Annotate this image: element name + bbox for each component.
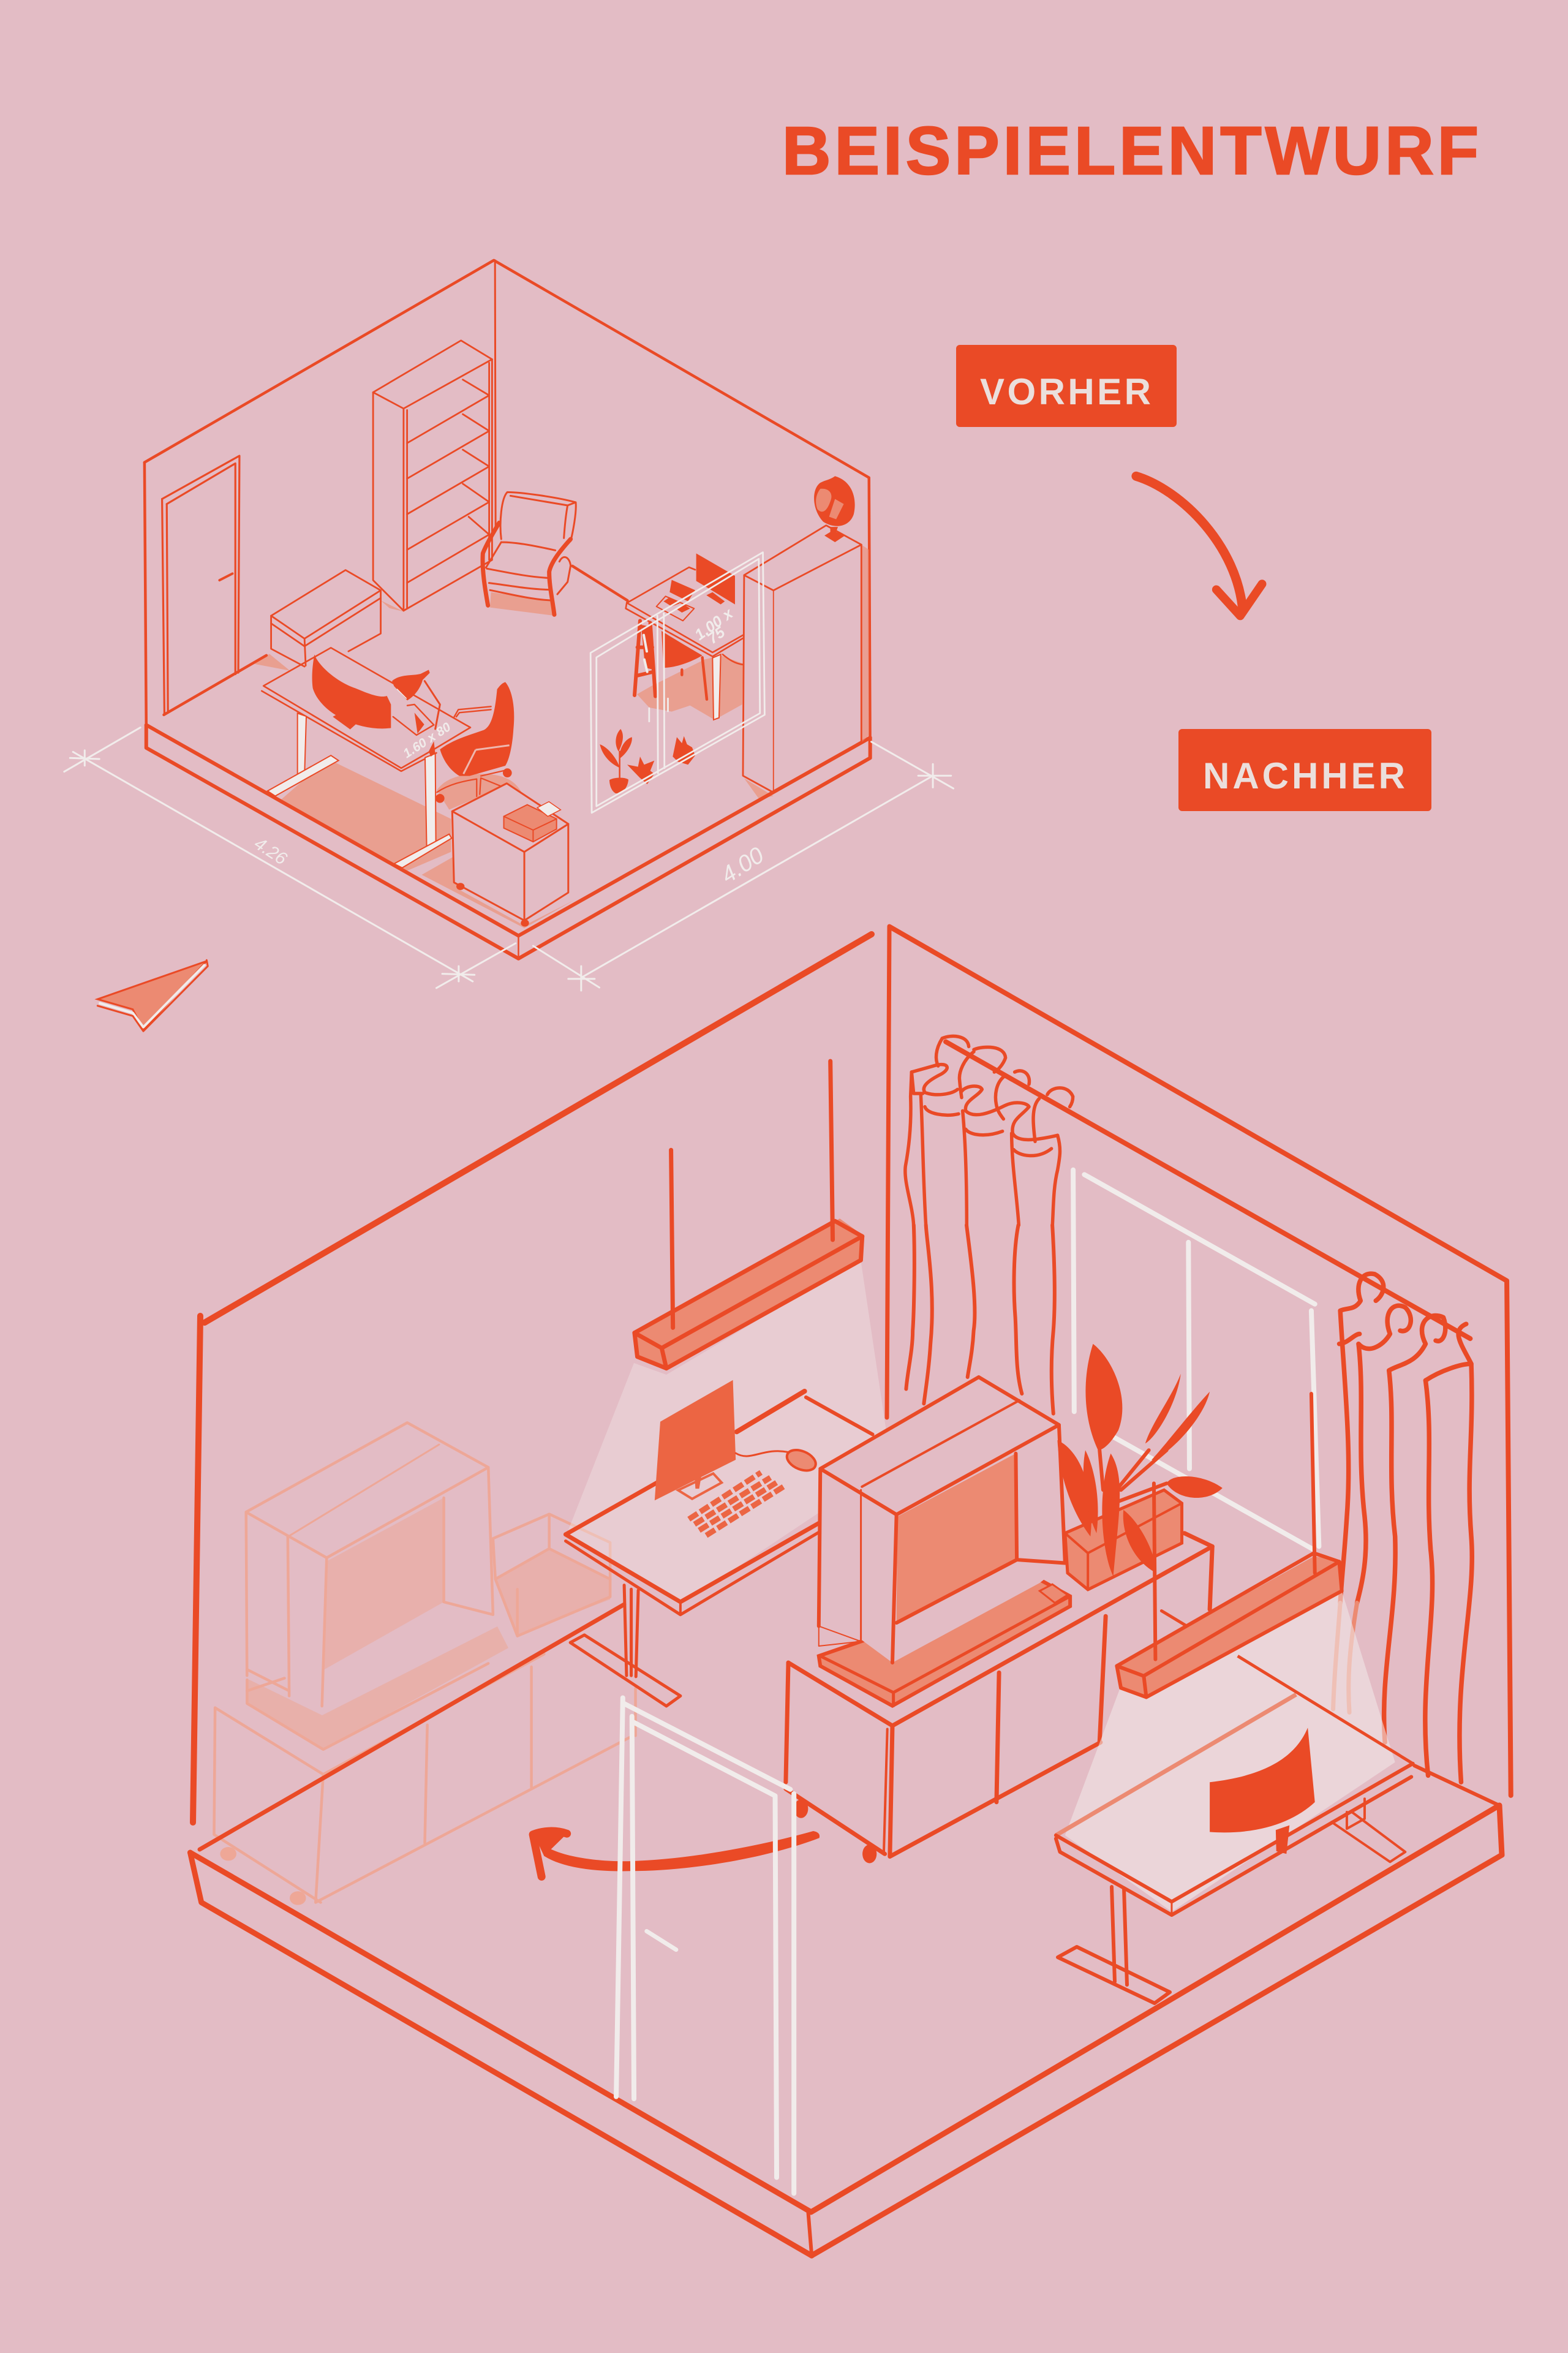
curtain left [906,1225,1055,1414]
icon: mouse [736,1446,818,1475]
pendant lamp 1 [635,1061,862,1369]
label: nachher [1178,729,1431,811]
shell [193,926,889,1849]
icon: paper plane north arrow [97,960,208,1031]
storage box [271,570,381,667]
floor plate [190,1853,812,2256]
curtains, window, sideboard [786,927,1511,1915]
back desk and chair [626,553,743,720]
second desk [1056,1656,1499,1915]
room shell [145,260,870,959]
arrow: door swing [533,1831,820,1876]
icon: globe [814,476,855,542]
light cone 1 [567,1259,889,1605]
sideboard [786,1533,1212,1857]
icon: keyboard [689,1473,783,1535]
label: nachher: NACHHER [1203,755,1405,796]
dimension lines [64,728,954,991]
label: vorher: VORHER [980,371,1151,412]
wall outline [890,927,1511,1796]
window [1073,1170,1319,1550]
illustration: room after [190,926,1511,2256]
illustration: room before [64,260,954,991]
dimension: 4.26: 4.26 [251,834,291,869]
title: BEISPIELENTWURF [782,113,1479,189]
floor shadows [255,600,774,928]
desk with monitor [262,648,470,868]
pendant lamp 2 [1117,1394,1342,1697]
bookshelf [373,341,492,611]
plants [600,729,695,793]
door [162,456,239,715]
curtain right [1340,1274,1472,1782]
icon: monitor [655,1380,736,1500]
tv base [819,1580,1070,1706]
curtain tops left [905,1036,1073,1225]
door outline [616,1698,794,2193]
label: vorher [956,345,1177,427]
dimension: 4.00: 4.00 [717,842,769,889]
armchair [483,492,576,616]
dimension: desk 2: 1.00 x [692,605,737,644]
light cone 2 [1065,1591,1395,1912]
plant [1057,1344,1223,1590]
second desk legs [1058,1887,1170,2003]
white planning frames [590,553,764,813]
desk and computer [565,1061,873,1706]
ghost furniture [214,1422,636,1905]
side cabinet with printer [452,784,568,927]
media cabinet [819,1377,1065,1663]
office chair [435,682,522,810]
dimension: desk 1: 1.60 x 80 [401,720,453,761]
tall cabinet [743,526,869,793]
arrow: vorher to nachher [1136,476,1262,616]
dimension: desk 2: 75 [704,623,729,648]
